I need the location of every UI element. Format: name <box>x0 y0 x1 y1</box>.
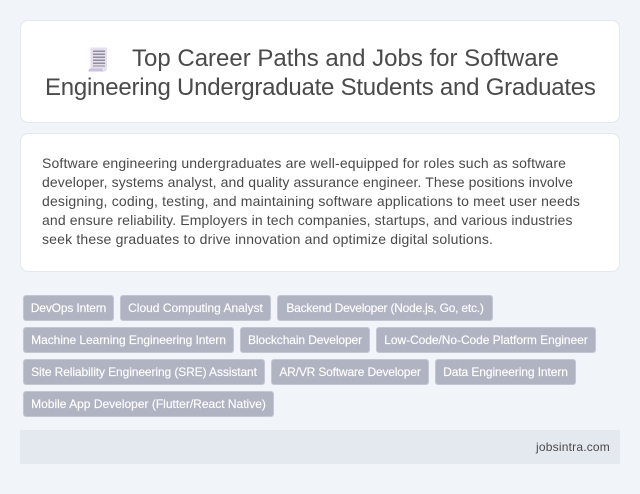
job tags <box>23 295 596 417</box>
description text: and ensure reliability. Employers in tech companies, startups, and various industries <box>42 212 573 228</box>
tag: Mobile App Developer: Mobile App Developer (Flutter/React Native) <box>31 397 266 411</box>
tag: Mobile App Developer <box>23 391 274 417</box>
title: Top Career Paths and Jobs for Software <box>132 45 559 72</box>
description text: designing, coding, testing, and maintaining software applications to meet user needs <box>42 193 580 209</box>
tag: Backend Developer <box>277 295 493 321</box>
tag: Data Engineering Intern: Data Engineering Intern <box>443 365 568 379</box>
footer bar <box>20 430 620 464</box>
tag: Low-Code/No-Code Platform Engineer: Low-Code/No-Code Platform Engineer <box>384 333 588 347</box>
description text: seek these graduates to drive innovation and optimize digital solutions. <box>42 231 493 247</box>
description panel <box>20 133 620 272</box>
title: Engineering Undergraduate Students and Graduates <box>45 74 596 101</box>
footer source text: jobsintra.com <box>536 440 610 454</box>
tag: Backend Developer: Backend Developer (Node.js, Go, etc.) <box>286 301 484 315</box>
tag: Blockchain Developer: Blockchain Developer <box>248 333 362 347</box>
description text: Software engineering undergraduates are well-equipped for roles such as software <box>42 155 566 171</box>
tag: Blockchain Developer <box>240 327 370 353</box>
tag: AR/VR Software Developer <box>271 359 429 385</box>
icon: document scroll <box>88 48 107 72</box>
tag: DevOps Intern <box>23 295 114 321</box>
header panel <box>20 20 620 123</box>
tag: AR/VR Software Developer: AR/VR Software Developer <box>279 365 421 379</box>
tag: Cloud Computing Analyst <box>120 295 271 321</box>
tag: DevOps Intern: DevOps Intern <box>31 301 106 315</box>
tag: Low-Code/No-Code Platform Engineer <box>376 327 596 353</box>
description text: developer, systems analyst, and quality assurance engineer. These positions involve <box>42 174 573 190</box>
description text <box>42 155 580 247</box>
tag: Cloud Computing Analyst: Cloud Computing Analyst <box>128 301 263 315</box>
tag: Machine Learning Engineering Intern <box>23 327 234 353</box>
tag: Machine Learning Engineering Intern: Machine Learning Engineering Intern <box>31 333 226 347</box>
tag: Site Reliability Engineering (SRE) Assistant <box>23 359 265 385</box>
title <box>45 45 596 101</box>
tag: Data Engineering Intern <box>435 359 576 385</box>
tag: Site Reliability Engineering (SRE) Assistant: Site Reliability Engineering (SRE) Assistant <box>31 365 257 379</box>
